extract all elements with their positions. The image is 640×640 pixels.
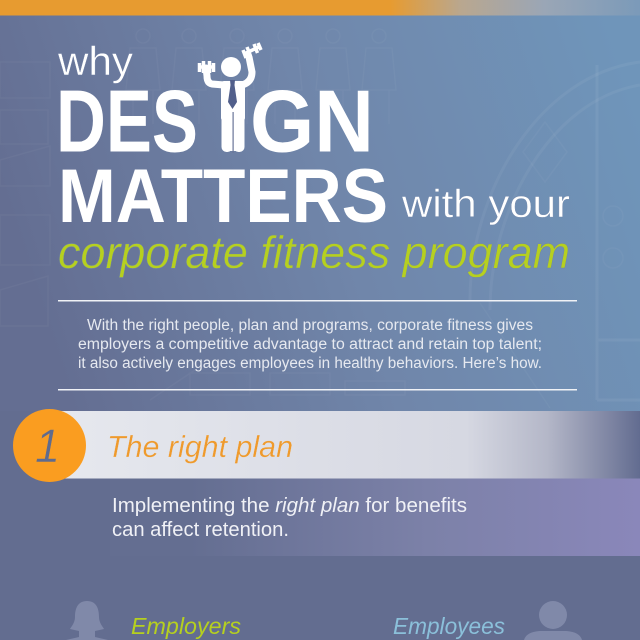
heading: corporate fitness program: corporate fitness program (58, 227, 570, 278)
heading: DESIGN with fitness figure as the letter I (56, 43, 374, 170)
panel: section 1 sub band (110, 478, 640, 556)
heading: MATTERS: MATTERS (58, 154, 388, 239)
panel: section 1 header band (60, 411, 640, 478)
label: Employers: Employers (131, 613, 241, 639)
faint background blueprint pattern (0, 29, 640, 408)
icon: employer woman (66, 601, 108, 640)
hero gradient panel (0, 15, 640, 411)
intro text: it also actively engages employees in healthy behaviors. Here’s how. (78, 355, 542, 372)
heading: why: why (57, 38, 134, 84)
heading: DESIGN with fitness figure as the letter I: DES (56, 72, 198, 170)
intro text: employers a competitive advantage to attract and retain top talent; (78, 336, 542, 353)
label: Employees: Employees (393, 613, 505, 639)
icon: employee man (524, 601, 582, 640)
icon: businessman lifting dumbbells (199, 43, 261, 170)
section description: can affect retention. (112, 519, 289, 541)
heading: with your: with your (401, 183, 570, 226)
section description: Implementing the right plan for benefits (112, 495, 467, 517)
number badge (13, 409, 86, 482)
section title: The right plan (107, 429, 293, 464)
intro text (78, 317, 542, 372)
section description (112, 495, 467, 541)
icon: businessman lifting dumbbells: I (222, 71, 245, 170)
intro text: With the right people, plan and programs, corporate fitness gives (87, 317, 533, 334)
heading: DESIGN with fitness figure as the letter I: GN (250, 72, 374, 170)
intro block (58, 300, 577, 390)
number badge: 1 (35, 419, 60, 472)
top accent bar (0, 0, 640, 16)
